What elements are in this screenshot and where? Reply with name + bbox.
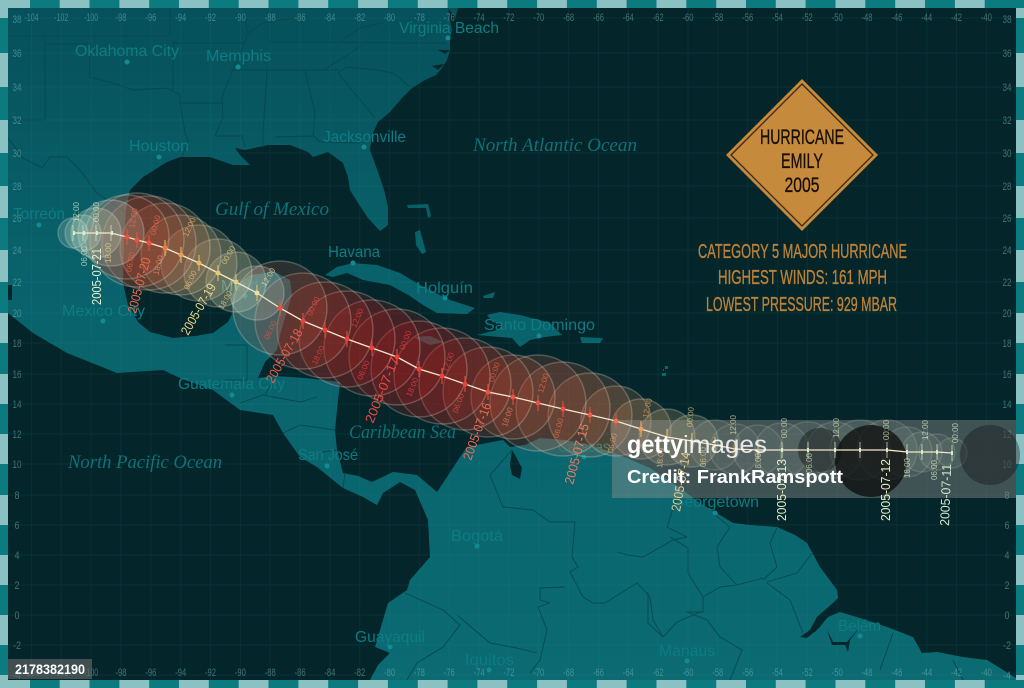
six-hourly time labels: 18:00 bbox=[217, 289, 235, 311]
track position dots bbox=[73, 231, 953, 455]
date labels along track: 2005-07-20 bbox=[124, 256, 154, 315]
bottom longitude labels: -42 bbox=[951, 667, 962, 679]
top longitude labels: -68 bbox=[563, 12, 574, 24]
city name labels: Caracas bbox=[558, 439, 610, 456]
right latitude labels: 28 bbox=[1002, 181, 1012, 193]
bottom longitude labels: -90 bbox=[235, 667, 246, 679]
left latitude labels: 2 bbox=[14, 580, 20, 592]
right latitude labels: 16 bbox=[1002, 369, 1012, 381]
six-hourly time labels: 00:00 bbox=[149, 214, 163, 236]
bottom longitude labels: -60 bbox=[682, 667, 694, 679]
bottom longitude labels: -54 bbox=[772, 667, 783, 679]
top longitude labels: -58 bbox=[712, 12, 723, 24]
city name labels: Georgetown bbox=[672, 494, 759, 511]
right latitude labels: 0 bbox=[1004, 610, 1010, 622]
image credit watermark: getty bbox=[627, 431, 683, 459]
left latitude labels: 12 bbox=[12, 429, 22, 441]
city name labels: Virginia Beach bbox=[399, 20, 499, 37]
date labels along track: 2005-07-16 bbox=[460, 401, 494, 462]
six-hourly time labels: 06:00 bbox=[182, 269, 199, 291]
six-hourly time labels: 18:00 bbox=[903, 457, 912, 478]
left latitude labels: 24 bbox=[12, 245, 22, 257]
top longitude labels: -42 bbox=[951, 12, 962, 24]
ocean and sea labels: Gulf of Mexico bbox=[215, 199, 329, 220]
right latitude labels: 10 bbox=[1002, 459, 1012, 471]
six-hourly time labels: 12:00 bbox=[72, 201, 81, 222]
ocean and sea labels: North Pacific Ocean bbox=[67, 452, 222, 473]
six-hourly time labels: 12:00 bbox=[832, 417, 841, 438]
top longitude labels: -74 bbox=[474, 12, 485, 24]
bottom longitude labels: -50 bbox=[832, 667, 843, 679]
city name labels: Bogotá bbox=[451, 528, 503, 545]
top longitude labels: -56 bbox=[742, 12, 753, 24]
date labels along track: 2005-07-12 bbox=[878, 459, 893, 521]
top longitude labels: -54 bbox=[772, 12, 783, 24]
right latitude labels: 26 bbox=[1002, 213, 1012, 225]
six-hourly time labels: 12:00 bbox=[729, 414, 738, 435]
city name labels: Manaus bbox=[659, 643, 715, 660]
left latitude labels: 4 bbox=[14, 550, 20, 562]
six-hourly time labels: 18:00 bbox=[655, 447, 666, 468]
right latitude labels: 6 bbox=[1004, 520, 1010, 532]
bottom longitude labels: -78 bbox=[414, 667, 425, 679]
city name labels: Jacksonville bbox=[323, 129, 406, 146]
top longitude labels: -96 bbox=[145, 12, 156, 24]
six-hourly time labels: 00:00 bbox=[780, 417, 789, 438]
top longitude labels: -40 bbox=[981, 12, 992, 24]
six-hourly time labels: 00:00 bbox=[487, 361, 502, 383]
top longitude labels: -80 bbox=[384, 12, 395, 24]
top longitude labels: -70 bbox=[533, 12, 544, 24]
left latitude labels: 38 bbox=[12, 14, 22, 26]
right latitude labels: 4 bbox=[1004, 550, 1010, 562]
six-hourly time labels: 12:00 bbox=[260, 266, 278, 288]
title text: EMILY bbox=[781, 150, 823, 173]
city name labels: Holguín bbox=[416, 280, 473, 297]
six-hourly time labels: 12:00 bbox=[441, 351, 456, 373]
bottom longitude labels: -88 bbox=[265, 667, 276, 679]
six-hourly time labels: 06:00 bbox=[606, 432, 619, 454]
bottom longitude labels: -96 bbox=[145, 667, 156, 679]
bottom longitude labels: -98 bbox=[116, 667, 126, 679]
date labels along track: 2005-07-14 bbox=[668, 451, 693, 513]
left latitude labels: 6 bbox=[14, 520, 20, 532]
city name labels: Mexico City bbox=[62, 303, 145, 320]
city name labels: Santo Domingo bbox=[484, 317, 595, 334]
date labels along track: 2005-07-18 bbox=[263, 326, 306, 386]
land: Jamaica bbox=[413, 336, 444, 345]
city name labels bbox=[13, 20, 881, 669]
right latitude labels: -2 bbox=[1003, 640, 1011, 652]
top longitude labels: -94 bbox=[175, 12, 186, 24]
left latitude labels: -4 bbox=[13, 670, 21, 682]
bottom longitude labels: -82 bbox=[354, 667, 365, 679]
six-hourly time labels: 18:00 bbox=[754, 452, 763, 473]
weak eastern circles bbox=[690, 420, 967, 480]
date labels along track: 2005-07-21 bbox=[89, 248, 104, 305]
left latitude labels: 0 bbox=[14, 610, 20, 622]
city name labels: Oklahoma City bbox=[75, 43, 179, 60]
bottom longitude labels: -66 bbox=[593, 667, 604, 679]
bottom longitude labels: -44 bbox=[921, 667, 932, 679]
six-hourly time labels: 06:00 bbox=[80, 245, 89, 266]
six-hourly time labels: 06:00 bbox=[552, 417, 566, 439]
bottom longitude labels: -80 bbox=[384, 667, 395, 679]
top longitude labels bbox=[24, 12, 992, 24]
top longitude labels: -86 bbox=[295, 12, 306, 24]
top longitude labels: -66 bbox=[593, 12, 604, 24]
date labels along track: 2005-07-11 bbox=[937, 464, 954, 526]
city name labels: San José bbox=[298, 447, 358, 464]
date labels along track: 2005-07-17 bbox=[362, 355, 402, 425]
image id tag: 2178382190 bbox=[15, 661, 85, 677]
left latitude labels: 28 bbox=[12, 181, 22, 193]
six-hourly time labels: 18:00 bbox=[104, 242, 113, 263]
title text: HURRICANE bbox=[760, 126, 844, 149]
top longitude labels: -88 bbox=[265, 12, 276, 24]
storm statistics: CATEGORY 5 MAJOR HURRICANE bbox=[698, 241, 907, 263]
attribution band background bbox=[612, 420, 1016, 498]
storm wind-radius circles along track bbox=[58, 193, 967, 480]
storm statistics bbox=[698, 241, 907, 316]
date labels along track: 2005-07-15 bbox=[561, 422, 592, 486]
top longitude labels: -72 bbox=[503, 12, 514, 24]
city name labels: Belém bbox=[838, 618, 881, 635]
ocean and sea labels bbox=[67, 135, 637, 473]
bottom longitude labels: -56 bbox=[742, 667, 753, 679]
left latitude labels: 14 bbox=[12, 399, 22, 411]
right latitude labels: 32 bbox=[1002, 115, 1012, 127]
land: Cuba bbox=[325, 263, 475, 314]
top longitude labels: -46 bbox=[891, 12, 902, 24]
title sign: diamond bbox=[726, 79, 878, 231]
city name labels: Mérida bbox=[221, 278, 267, 295]
right latitude labels: 20 bbox=[1002, 308, 1012, 320]
right latitude labels: 2 bbox=[1004, 580, 1010, 592]
top longitude labels: -78 bbox=[414, 12, 425, 24]
city name labels: Memphis bbox=[206, 48, 271, 65]
bottom longitude labels: -94 bbox=[175, 667, 186, 679]
six-hourly time labels: 00:00 bbox=[305, 295, 322, 317]
right latitude labels: 38 bbox=[1002, 14, 1012, 26]
top longitude labels: -92 bbox=[205, 12, 216, 24]
bottom longitude labels: -86 bbox=[295, 667, 306, 679]
bottom longitude labels: -102 bbox=[54, 667, 68, 679]
left latitude labels: 20 bbox=[12, 308, 22, 320]
bottom longitude labels bbox=[24, 667, 992, 679]
storm track line bbox=[73, 233, 952, 453]
date labels along track bbox=[89, 248, 954, 526]
six-hourly time labels: 12:00 bbox=[641, 397, 654, 419]
bottom longitude labels: -58 bbox=[712, 667, 723, 679]
six-hourly time labels: 06:00 bbox=[262, 319, 279, 341]
city name labels: Torreón bbox=[13, 206, 65, 223]
top longitude labels: -62 bbox=[653, 12, 664, 24]
ocean and sea labels: North Atlantic Ocean bbox=[472, 135, 637, 156]
right latitude labels: 34 bbox=[1002, 82, 1012, 94]
city name labels: Havana bbox=[328, 244, 380, 261]
left latitude labels bbox=[12, 14, 22, 682]
ocean and sea labels: Caribbean Sea bbox=[349, 422, 456, 443]
title text bbox=[760, 126, 844, 197]
right latitude labels: 18 bbox=[1002, 338, 1012, 350]
six-hourly time labels: 00:00 bbox=[685, 406, 696, 427]
six-hourly time labels: 06:00 bbox=[356, 359, 372, 381]
right latitude labels: 8 bbox=[1004, 490, 1010, 502]
left latitude labels: 30 bbox=[12, 148, 22, 160]
bottom longitude labels: -70 bbox=[533, 667, 544, 679]
left latitude labels: -2 bbox=[13, 640, 21, 652]
six-hourly time labels: 06:00 bbox=[124, 251, 137, 273]
land: Puerto Rico bbox=[580, 337, 603, 343]
city markers bbox=[36, 36, 862, 672]
six-hourly time labels: 12:00 bbox=[181, 216, 198, 238]
six-hourly time labels: 18:00 bbox=[310, 344, 327, 366]
six-hourly time labels: 00:00 bbox=[92, 201, 101, 222]
right latitude labels: 22 bbox=[1002, 277, 1012, 289]
track position ticks bbox=[73, 225, 952, 461]
left latitude labels: 26 bbox=[12, 213, 22, 225]
city name labels: Guatemala City bbox=[178, 376, 285, 393]
six-hourly time labels: 18:00 bbox=[500, 406, 515, 428]
top longitude labels: -104 bbox=[24, 12, 38, 24]
right latitude labels: 24 bbox=[1002, 245, 1012, 257]
bottom longitude labels: -48 bbox=[862, 667, 872, 679]
right latitude labels: 36 bbox=[1002, 48, 1012, 60]
six-hourly time labels: 18:00 bbox=[152, 254, 166, 276]
bottom longitude labels: -64 bbox=[623, 667, 634, 679]
left latitude labels: 8 bbox=[14, 490, 20, 502]
city name labels: Houston bbox=[129, 138, 189, 155]
left latitude labels: 16 bbox=[12, 369, 22, 381]
top longitude labels: -44 bbox=[921, 12, 932, 24]
city name labels: Guayaquil bbox=[355, 629, 425, 646]
left latitude labels: 18 bbox=[12, 338, 22, 350]
six-hourly time labels: 06:00 bbox=[805, 452, 814, 473]
six-hourly time labels: 06:00 bbox=[699, 446, 708, 467]
right latitude labels: 30 bbox=[1002, 148, 1012, 160]
bottom longitude labels: -62 bbox=[653, 667, 664, 679]
top longitude labels: -50 bbox=[832, 12, 843, 24]
top longitude labels: -84 bbox=[324, 12, 335, 24]
left latitude labels: 32 bbox=[12, 115, 22, 127]
bottom longitude labels: -84 bbox=[324, 667, 335, 679]
bottom longitude labels: -72 bbox=[503, 667, 514, 679]
six-hourly time labels: 18:00 bbox=[405, 376, 421, 398]
image credit watermark bbox=[627, 431, 843, 487]
image credit watermark: Credit: FrankRamspott bbox=[627, 467, 843, 487]
six-hourly time labels: 06:00 bbox=[451, 392, 466, 414]
right latitude labels: -4 bbox=[1003, 670, 1011, 682]
date labels along track: 2005-07-19 bbox=[178, 281, 219, 338]
six-hourly time labels bbox=[72, 201, 960, 480]
top longitude labels: -64 bbox=[623, 12, 634, 24]
six-hourly time labels: 12:00 bbox=[921, 419, 930, 440]
six-hourly time labels: 00:00 bbox=[951, 422, 960, 443]
right latitude labels: 12 bbox=[1002, 429, 1012, 441]
left latitude labels: 34 bbox=[12, 82, 22, 94]
six-hourly time labels: 00:00 bbox=[398, 329, 414, 351]
bottom longitude labels: -74 bbox=[474, 667, 485, 679]
bottom longitude labels: -92 bbox=[205, 667, 216, 679]
land: Hispaniola bbox=[477, 312, 562, 347]
left latitude labels: 22 bbox=[12, 277, 22, 289]
bottom longitude labels: -68 bbox=[563, 667, 574, 679]
top longitude labels: -100 bbox=[84, 12, 98, 24]
dark watermark patches in band bbox=[798, 425, 1020, 497]
image credit watermark: images bbox=[683, 431, 767, 459]
six-hourly time labels: 12:00 bbox=[350, 307, 366, 329]
six-hourly time labels: 12:00 bbox=[536, 372, 551, 394]
bottom longitude labels: -100 bbox=[84, 667, 98, 679]
top longitude labels: -48 bbox=[862, 12, 872, 24]
land: Bahamas and small islands bbox=[407, 204, 668, 376]
right latitude labels bbox=[1002, 14, 1012, 682]
top longitude labels: -82 bbox=[354, 12, 365, 24]
bottom longitude labels: -76 bbox=[444, 667, 455, 679]
bottom longitude labels: -52 bbox=[802, 667, 813, 679]
top longitude labels: -102 bbox=[54, 12, 68, 24]
top longitude labels: -90 bbox=[235, 12, 246, 24]
bottom longitude labels: -46 bbox=[891, 667, 902, 679]
bottom longitude labels: -104 bbox=[24, 667, 38, 679]
storm statistics: LOWEST PRESSURE: 929 MBAR bbox=[706, 294, 897, 316]
right latitude labels: 14 bbox=[1002, 399, 1012, 411]
storm statistics: HIGHEST WINDS: 161 MPH bbox=[718, 267, 887, 289]
city name labels: Iquitos bbox=[465, 652, 514, 669]
left latitude labels: 10 bbox=[12, 459, 22, 471]
left latitude labels: 36 bbox=[12, 48, 22, 60]
title text: 2005 bbox=[784, 174, 820, 197]
bottom longitude labels: -40 bbox=[981, 667, 992, 679]
top longitude labels: -76 bbox=[444, 12, 455, 24]
date labels along track: 2005-07-13 bbox=[774, 459, 789, 521]
top longitude labels: -60 bbox=[682, 12, 694, 24]
six-hourly time labels: 00:00 bbox=[220, 244, 238, 266]
top longitude labels: -98 bbox=[116, 12, 126, 24]
six-hourly time labels: 00:00 bbox=[882, 419, 891, 440]
top longitude labels: -52 bbox=[802, 12, 813, 24]
six-hourly time labels: 12:00 bbox=[127, 207, 140, 229]
six-hourly time labels: 06:00 bbox=[930, 459, 939, 480]
